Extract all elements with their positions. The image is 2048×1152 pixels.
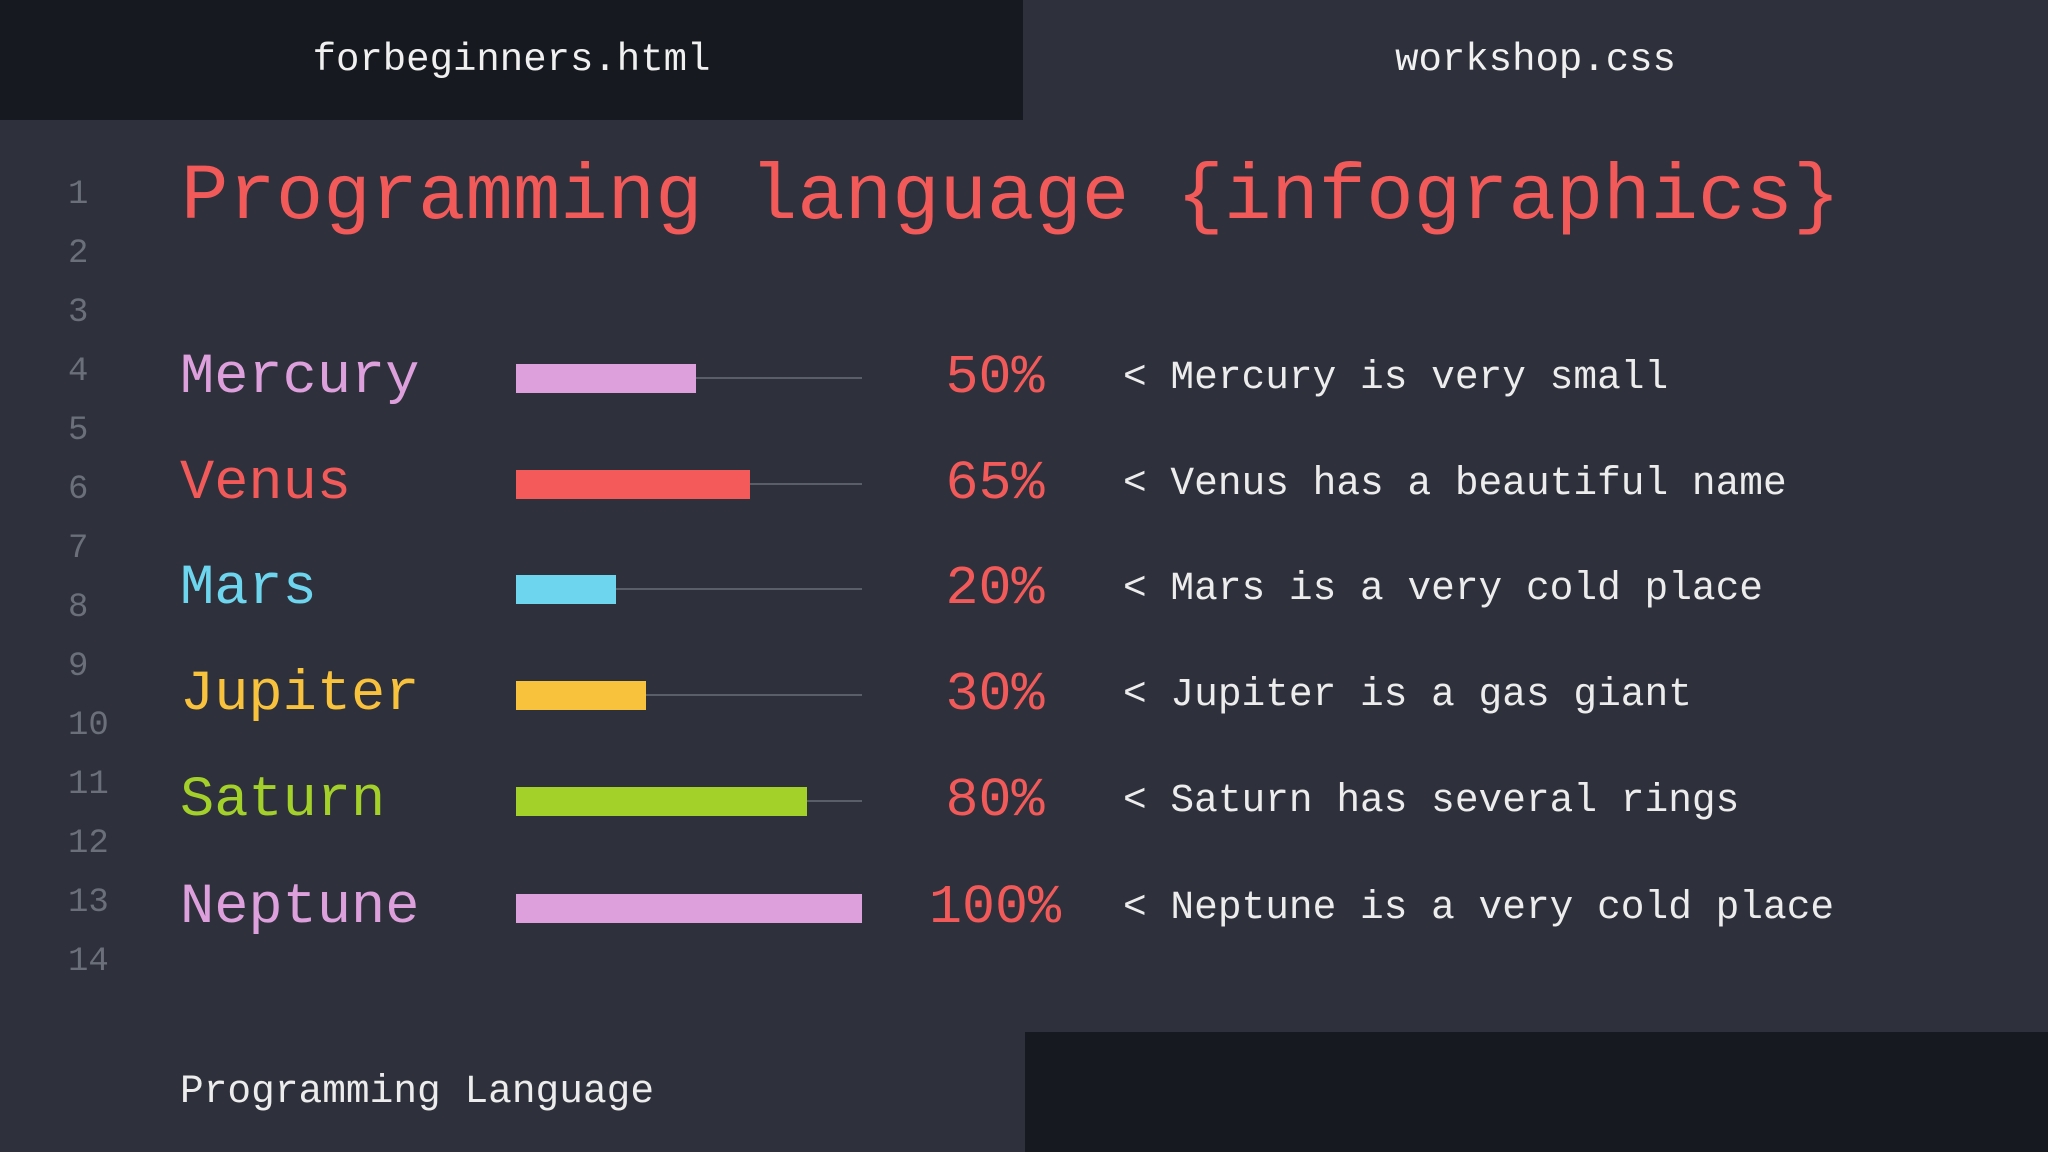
row: Venus: Venus: [180, 452, 351, 516]
row: Jupiter: Jupiter: [180, 663, 419, 727]
row: Saturn: [180, 769, 1739, 833]
row: Saturn: < Saturn has several rings: [1123, 778, 1739, 823]
footer label: Programming Language: [180, 1069, 654, 1114]
title: Programming language {infographics}: [181, 152, 1840, 242]
row: Mercury: 50%: [945, 346, 1045, 409]
tab: forbeginners.html: [0, 0, 1023, 120]
line numbers: 10: [68, 707, 109, 745]
line numbers: 4: [68, 353, 88, 391]
line numbers: 8: [68, 589, 88, 627]
row: Neptune: Neptune: [180, 876, 419, 940]
row: Venus: 65%: [945, 452, 1045, 515]
bottom right dark block: [1025, 1032, 2048, 1152]
row: Neptune: [180, 876, 1834, 940]
line numbers: 14: [68, 943, 109, 981]
row: Jupiter: [180, 663, 1692, 727]
line numbers: 6: [68, 471, 88, 509]
row: Jupiter: 30%: [945, 663, 1045, 726]
row: Mars: 20%: [945, 557, 1045, 620]
line numbers: 7: [68, 530, 88, 568]
row: Saturn: Saturn: [180, 769, 385, 833]
row: Mercury: Mercury: [180, 346, 419, 410]
row: Mars: Mars: [180, 557, 317, 621]
row: Saturn: 80%: [945, 769, 1045, 832]
tab: forbeginners.html: forbeginners.html: [313, 38, 710, 82]
row: Mars: [180, 557, 1763, 621]
row: Neptune: 100%: [929, 876, 1061, 939]
row: Mars: < Mars is a very cold place: [1123, 566, 1763, 611]
row: Jupiter: < Jupiter is a gas giant: [1123, 672, 1692, 717]
line numbers: 13: [68, 884, 109, 922]
line numbers: 5: [68, 412, 88, 450]
line numbers: 3: [68, 294, 88, 332]
line numbers: [68, 176, 109, 981]
row: Venus: < Venus has a beautiful name: [1123, 461, 1787, 506]
line numbers: 11: [68, 766, 109, 804]
line numbers: 2: [68, 235, 88, 273]
row: Mercury: [180, 346, 1668, 410]
line numbers: 12: [68, 825, 109, 863]
line numbers: 9: [68, 648, 88, 686]
row: Neptune: < Neptune is a very cold place: [1123, 885, 1834, 930]
row: Venus: [180, 452, 1787, 516]
line numbers: 1: [68, 176, 88, 214]
row: Mercury: < Mercury is very small: [1123, 355, 1668, 400]
tab: workshop.css: workshop.css: [1395, 38, 1676, 82]
